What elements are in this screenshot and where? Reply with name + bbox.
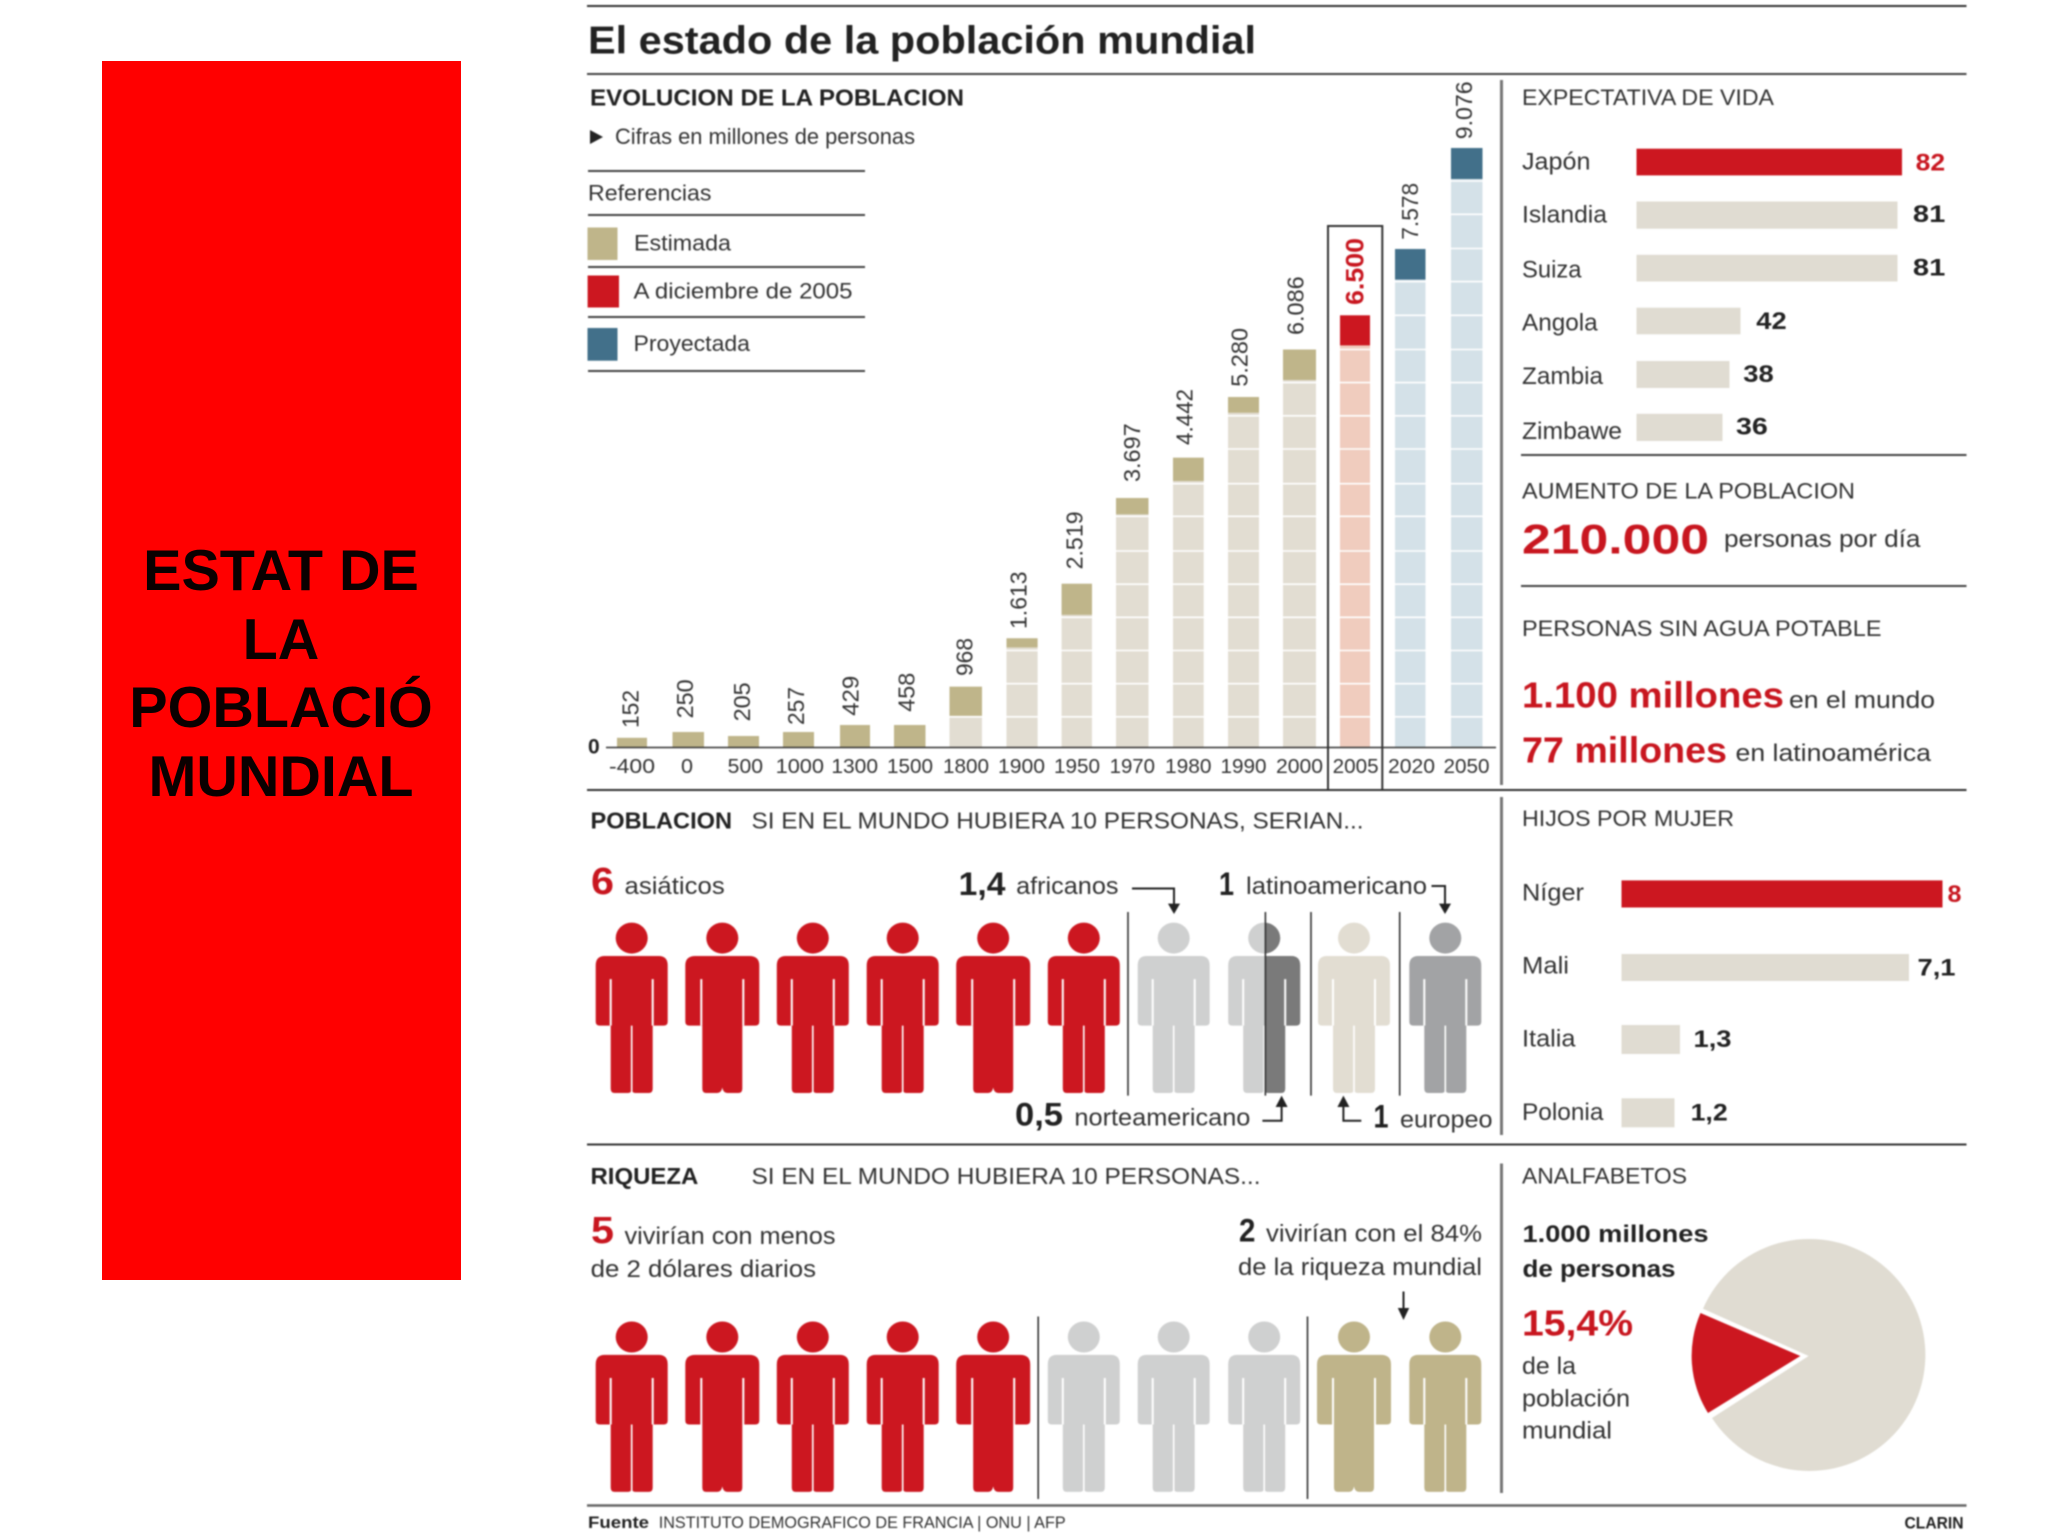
bar: Suiza 81: Suiza	[1522, 256, 1582, 284]
panel: analfabetos: 1.000 millones	[1522, 1221, 1708, 1248]
person icon: africano	[1138, 923, 1210, 1093]
bar: Suiza 81	[1522, 255, 1945, 284]
value labels: 7.578	[1397, 183, 1423, 240]
panel: personas sin agua potable: 1.100 millones	[1522, 674, 1784, 716]
bar: Italia 1,3: 1,3	[1694, 1026, 1732, 1053]
value labels: 4.442	[1172, 389, 1198, 445]
heading: Estat de la població mundial: ESTAT DE	[143, 539, 419, 603]
bar: Suiza 81: 81	[1913, 255, 1945, 282]
year axis labels	[588, 736, 1490, 778]
value labels: 9.076	[1451, 81, 1477, 139]
label: 6 asiáticos	[591, 861, 725, 903]
panel: analfabetos: de personas	[1522, 1256, 1676, 1283]
heading: riqueza: SI EN EL MUNDO HUBIERA 10 PERSONAS...	[752, 1163, 1260, 1189]
label: 1,4 africanos with arrow: africanos	[1016, 873, 1118, 900]
legend: Proyectada	[634, 331, 751, 356]
legend: Referencias	[588, 180, 712, 206]
year axis labels: 500	[728, 756, 763, 778]
label: 5 vivirían con menos de 2 dólares: 5	[591, 1210, 614, 1252]
value labels: 429	[838, 676, 864, 716]
value labels: 257	[783, 687, 809, 725]
label: 5 vivirían con menos de 2 dólares: vivirían con menos	[624, 1223, 836, 1250]
value labels: 5.280	[1226, 328, 1252, 387]
panel: personas sin agua potable	[1522, 616, 1935, 770]
value labels: 2.519	[1061, 511, 1087, 569]
value labels: 205	[729, 682, 755, 721]
heading: riqueza: RIQUEZA	[590, 1163, 698, 1189]
label: 1 europeo with arrow: 1	[1374, 1098, 1388, 1134]
person icon: europeo	[1409, 923, 1481, 1093]
panel: analfabetos	[1522, 1164, 1925, 1471]
bar: Zimbawe 36: Zimbawe	[1522, 418, 1622, 445]
year axis labels: 1950	[1054, 756, 1100, 778]
infographic	[587, 5, 1966, 1532]
dividers between groups	[1038, 1316, 1308, 1499]
label: 1,4 africanos with arrow	[959, 866, 1180, 914]
year axis labels: 1900	[998, 756, 1045, 778]
label: 2 vivirían con el 84%	[1238, 1213, 1482, 1281]
pie chart: 15,4%	[1692, 1239, 1925, 1471]
label: 1 europeo with arrow: europeo	[1400, 1106, 1492, 1133]
panel: hijos por mujer	[1522, 806, 1962, 1127]
bar chart: population columns	[617, 148, 1490, 748]
people icons: 3 grey	[1048, 1322, 1300, 1492]
bar: Níger 8: Níger	[1522, 879, 1584, 906]
label: 0,5 norteamericano with arrow: norteamericano	[1074, 1105, 1250, 1132]
value labels: 6.086	[1282, 276, 1308, 335]
bar: Italia 1,3: Italia	[1522, 1026, 1576, 1052]
person icon: latinoamericano	[1318, 923, 1390, 1093]
source line	[588, 1513, 1964, 1532]
note: cifras en millones: Cifras en millones de personas	[615, 124, 915, 149]
year axis labels: 1500	[887, 756, 933, 778]
label: 2 vivirían con el 84%: 2	[1239, 1213, 1255, 1249]
label: 1,4 africanos with arrow: 1,4	[959, 866, 1006, 902]
panel: analfabetos: ANALFABETOS	[1522, 1164, 1687, 1188]
year axis labels: 1980	[1165, 756, 1212, 778]
bar: Japón 82: Japón	[1522, 148, 1590, 176]
bar: Mali 7,1	[1522, 952, 1956, 982]
heading: población: SI EN EL MUNDO HUBIERA 10 PERSONAS, SERIAN...	[752, 808, 1364, 834]
dividers between groups	[1128, 912, 1400, 1096]
source line: Fuente	[588, 1513, 649, 1532]
bar: Islandia 81: Islandia	[1522, 202, 1608, 228]
legend: Estimada	[634, 230, 732, 256]
bar: Zambia 38: Zambia	[1522, 363, 1604, 390]
value labels	[618, 81, 1477, 728]
year axis labels: 0	[588, 736, 600, 759]
arrow: down to tan figures	[1398, 1292, 1409, 1320]
heading: Estat de la població mundial: LA	[243, 608, 319, 672]
label: 2 vivirían con el 84%: de la riqueza mundial	[1238, 1254, 1482, 1281]
panel: aumento de la población: AUMENTO DE LA POBLACION	[1522, 479, 1855, 504]
label: 1 latinoamericano with arrow	[1219, 866, 1451, 914]
title: El estado de la población mundial: El estado de la población mundial	[588, 20, 1256, 63]
year axis labels: 2020	[1388, 756, 1435, 778]
bar: Italia 1,3	[1522, 1025, 1732, 1054]
bar: Angola 42: 42	[1756, 308, 1787, 335]
panel: personas sin agua potable: 77 millones	[1522, 730, 1727, 770]
panel: riqueza	[590, 1163, 1482, 1499]
panel: red title block	[102, 61, 461, 1280]
people icons: 2 tan	[1317, 1322, 1481, 1492]
bar: Angola 42	[1522, 308, 1787, 336]
bar: Zimbawe 36	[1522, 414, 1768, 445]
heading: expectativa de vida: EXPECTATIVA DE VIDA	[1522, 85, 1774, 110]
people icons: 5 red	[596, 1322, 1030, 1492]
label: 6 asiáticos: 6	[591, 861, 614, 903]
panel: evolución de la población	[588, 81, 1496, 790]
legend	[588, 171, 865, 371]
panel: aumento de la población: 210.000	[1522, 515, 1709, 562]
value labels: 1.613	[1006, 571, 1032, 629]
bar: Polonia 1,2	[1522, 1098, 1728, 1127]
value labels: 6.500	[1342, 238, 1370, 305]
panel: hijos por mujer: HIJOS POR MUJER	[1522, 806, 1734, 831]
year axis labels: 1990	[1220, 756, 1266, 778]
chart axis and 2005 highlight box	[606, 226, 1496, 790]
heading: Estat de la població mundial: POBLACIÓ	[129, 676, 433, 740]
label: 5 vivirían con menos de 2 dólares: de 2 dólares diarios	[591, 1256, 816, 1283]
label: 0,5 norteamericano with arrow: 0,5	[1015, 1097, 1063, 1133]
bar: Islandia 81	[1522, 201, 1945, 229]
year axis labels: 0	[681, 756, 693, 778]
people icons: 6 red	[596, 923, 1120, 1093]
bar: Zambia 38: 38	[1743, 361, 1774, 388]
bar: Zimbawe 36: 36	[1736, 414, 1768, 441]
label: 1 latinoamericano with arrow: 1	[1219, 866, 1234, 902]
bar: Zambia 38	[1522, 361, 1774, 390]
bar: Islandia 81: 81	[1913, 201, 1945, 228]
panel: analfabetos: de la	[1522, 1353, 1577, 1380]
year axis labels: 1970	[1110, 756, 1155, 778]
person icon: africano / norteamericano split	[1228, 923, 1300, 1093]
year axis labels: 1300	[831, 756, 878, 778]
year axis labels: 2050	[1444, 756, 1490, 778]
year axis labels: 1800	[943, 756, 989, 778]
panel: analfabetos: población	[1522, 1386, 1630, 1413]
label: 2 vivirían con el 84%: vivirían con el 84%	[1266, 1221, 1482, 1248]
bar: Polonia 1,2: 1,2	[1691, 1100, 1728, 1127]
year axis labels: 1000	[776, 756, 824, 778]
value labels: 3.697	[1119, 423, 1145, 482]
source line: CLARIN	[1904, 1513, 1964, 1532]
heading: Estat de la població mundial: MUNDIAL	[148, 745, 414, 809]
panel: personas sin agua potable: en el mundo	[1789, 687, 1935, 714]
panel: aumento de la población: personas por día	[1724, 526, 1921, 553]
bar: Angola 42: Angola	[1522, 310, 1598, 336]
column and section rules	[587, 80, 1966, 1506]
year axis labels: -400	[609, 756, 655, 778]
label: 5 vivirían con menos de 2 dólares	[591, 1210, 836, 1283]
year axis labels: 2005	[1333, 756, 1379, 778]
bar: Polonia 1,2: Polonia	[1522, 1099, 1604, 1126]
panel: expectativa de vida	[1522, 85, 1945, 445]
label: 1 europeo with arrow	[1337, 1096, 1492, 1134]
value labels: 250	[672, 679, 698, 718]
panel: personas sin agua potable: en latinoamérica	[1736, 740, 1932, 767]
label: 0,5 norteamericano with arrow	[1015, 1096, 1288, 1133]
heading: evolución: EVOLUCION DE LA POBLACION	[590, 85, 964, 111]
bar: Níger 8: 8	[1948, 881, 1962, 908]
legend: A diciembre de 2005	[634, 278, 852, 304]
heading: población: POBLACION	[590, 808, 732, 834]
panel: aumento de la población	[1522, 479, 1921, 562]
bar: Mali 7,1: Mali	[1522, 952, 1569, 980]
value labels: 458	[894, 673, 920, 712]
year axis labels: 2000	[1276, 756, 1323, 778]
bar: Japón 82: 82	[1916, 150, 1945, 176]
bar: Mali 7,1: 7,1	[1918, 955, 1956, 982]
bar: Japón 82	[1522, 148, 1945, 176]
value labels: 968	[952, 638, 978, 676]
value labels: 152	[618, 690, 644, 728]
source line: INSTITUTO DEMOGRAFICO DE FRANCIA | ONU | AFP	[659, 1513, 1066, 1532]
panel: población, si en el mundo hubiera 10 personas	[590, 808, 1492, 1134]
panel: analfabetos: mundial	[1522, 1418, 1612, 1444]
panel: analfabetos: 15,4%	[1522, 1303, 1633, 1344]
label: 6 asiáticos: asiáticos	[624, 873, 725, 900]
bar: Níger 8	[1522, 879, 1962, 908]
label: 1 latinoamericano with arrow: latinoamericano	[1246, 873, 1427, 900]
panel: personas sin agua potable: PERSONAS SIN AGUA POTABLE	[1522, 616, 1882, 641]
